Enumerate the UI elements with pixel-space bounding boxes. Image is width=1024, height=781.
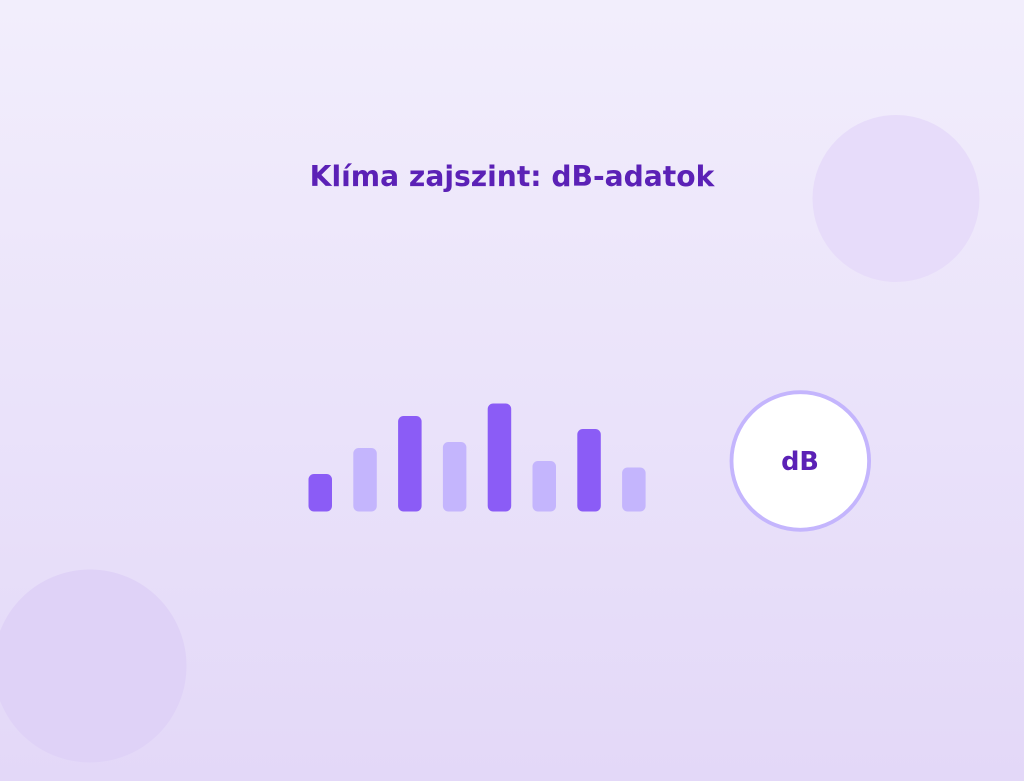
title: Klíma zajszint: dB-adatok (310, 160, 716, 193)
bar 8 (622, 468, 646, 512)
bar 3 (398, 416, 422, 512)
dB badge (732, 392, 869, 530)
bar 4 (443, 442, 466, 512)
bar 1 (308, 474, 332, 512)
bar 6 (532, 461, 556, 512)
bar chart (308, 404, 646, 512)
badge label: dB (781, 447, 819, 477)
decorative circle: bottom left (0, 570, 186, 762)
bar 7 (577, 429, 601, 512)
decorative circle: top right (812, 115, 980, 282)
bar 2 (353, 448, 377, 512)
bar 5 (488, 404, 511, 512)
badge circle (732, 392, 869, 530)
